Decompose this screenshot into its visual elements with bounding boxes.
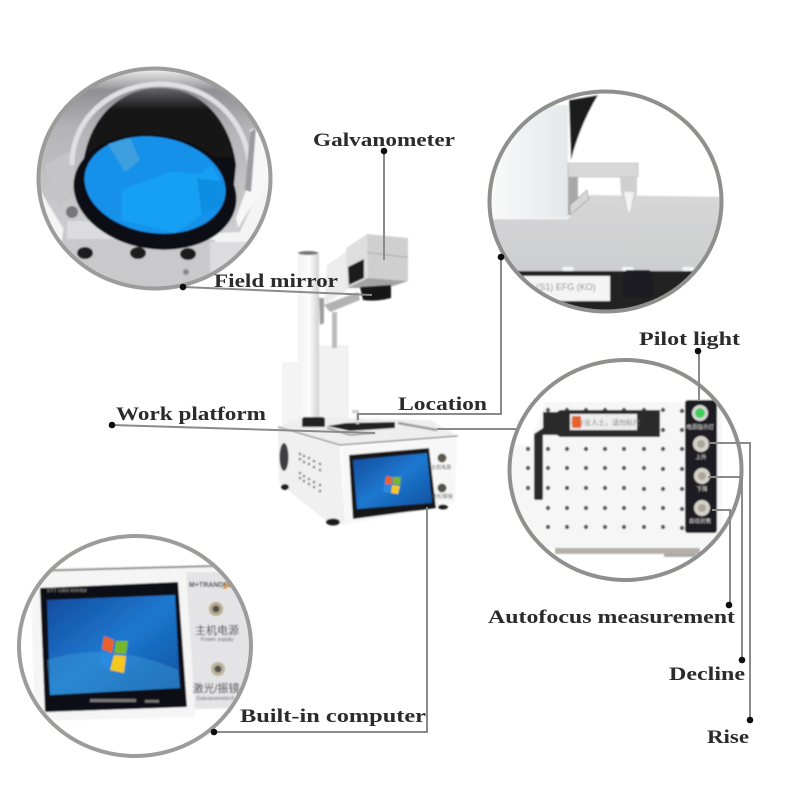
rise button <box>693 436 709 452</box>
pointer tip <box>620 176 638 197</box>
machine wall <box>502 104 568 218</box>
panel: control panel detail circle: 自动对焦 <box>689 517 711 525</box>
windows logo <box>98 636 128 673</box>
central machine <box>278 234 458 526</box>
pilot light <box>692 405 708 421</box>
panel: location detail circle: (S1) EFG (KO) <box>536 282 596 292</box>
label: Pilot light: Pilot light <box>639 329 741 350</box>
right platform buttons <box>398 423 437 430</box>
rear cabinet left <box>283 363 305 425</box>
side vents <box>299 453 321 492</box>
knobs <box>438 454 446 462</box>
central machine: 激光/振镜 <box>431 493 453 500</box>
pointer bracket <box>568 163 638 177</box>
black strip <box>518 270 694 310</box>
desktop <box>47 595 180 695</box>
panel: location detail circle <box>488 90 724 314</box>
fixture on platform <box>327 422 395 431</box>
panel: field mirror detail circle <box>36 66 272 290</box>
label: Decline: Decline <box>669 664 745 685</box>
side fan <box>280 443 288 471</box>
bottom edge <box>555 548 700 554</box>
galvanometer knob <box>211 662 225 676</box>
arm <box>324 252 347 305</box>
power knob <box>209 602 223 616</box>
label <box>523 276 610 301</box>
orange logo on ruler <box>572 416 581 428</box>
panel: control panel detail circle <box>500 355 750 585</box>
panel: control panel detail circle: 上升 <box>695 453 707 461</box>
screen <box>349 448 436 519</box>
grey platform <box>493 194 720 272</box>
base left side <box>278 429 345 525</box>
mounting bolts <box>77 247 93 259</box>
label: Location: Location <box>398 394 488 415</box>
decline button <box>694 468 710 484</box>
rear cabinet right <box>319 346 348 425</box>
screen bezel <box>40 582 187 712</box>
panel: control panel detail circle: 电源指示灯 <box>686 423 714 431</box>
metal mounting plate <box>61 230 216 286</box>
panel: built-in computer detail circle: Galvanometer/L <box>196 696 236 702</box>
panel: built-in computer detail circle <box>17 534 253 758</box>
ruler label <box>570 414 637 430</box>
column <box>298 252 319 422</box>
monitor buttons <box>90 699 136 702</box>
windows logo <box>383 476 401 494</box>
callout lines <box>112 151 750 732</box>
field lens <box>360 285 391 301</box>
black fin <box>569 95 598 160</box>
panel: built-in computer detail circle: Power supply <box>200 637 234 643</box>
strip notches <box>562 267 574 271</box>
galvanometer head <box>346 234 408 288</box>
lens barrel <box>83 88 237 185</box>
label: Work platform: Work platform <box>116 404 266 425</box>
bezel caption: DTT color monitor <box>47 588 87 594</box>
panel: control panel detail circle: 非专业人士，请勿标尺 <box>570 418 640 427</box>
galvanometer label: 激光/振镜 <box>192 681 240 695</box>
panel: control panel detail circle: 下降 <box>696 485 708 493</box>
feet <box>326 518 340 526</box>
base front <box>342 438 457 525</box>
column foot <box>302 417 325 427</box>
label: Rise: Rise <box>707 727 749 748</box>
location pointer <box>352 410 359 424</box>
power label: 主机电源 <box>195 623 239 637</box>
callout dots <box>109 148 753 735</box>
label: Autofocus measurement: Autofocus measurement <box>488 607 736 628</box>
platform top <box>278 417 458 445</box>
brand logo: M+TRANDEL <box>189 582 233 589</box>
black ruler <box>534 410 660 500</box>
right control face <box>186 572 255 709</box>
autofocus button <box>694 500 710 516</box>
knob <box>624 269 651 272</box>
support rod <box>332 312 337 348</box>
logo accent <box>222 582 230 590</box>
perforated holes <box>526 408 684 530</box>
lens ring <box>72 134 238 251</box>
black button panel <box>685 400 717 533</box>
label: Galvanometer: Galvanometer <box>313 130 456 151</box>
label: Field mirror: Field mirror <box>214 271 339 292</box>
outer hoop <box>72 84 250 170</box>
central machine: 主机电源 <box>431 464 451 471</box>
label: Built-in computer: Built-in computer <box>240 706 427 727</box>
blue lens <box>83 134 227 236</box>
